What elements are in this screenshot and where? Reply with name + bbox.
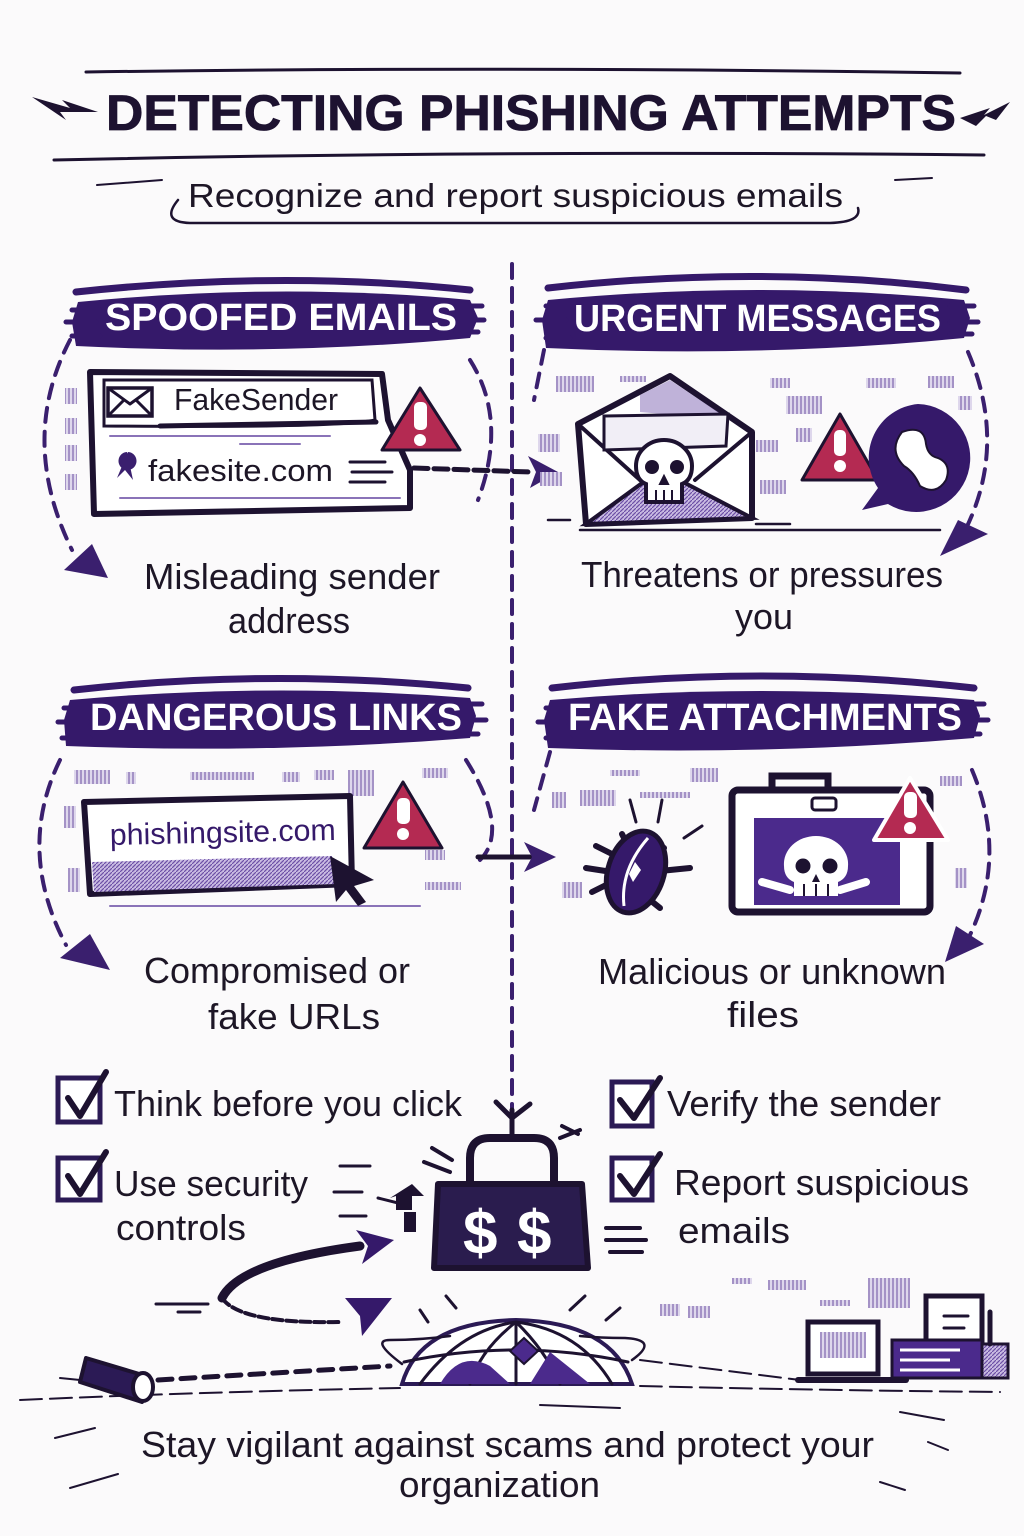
check: think before you click: Think before you click (114, 1083, 463, 1124)
subtitle: Recognize and report suspicious emails (188, 177, 843, 214)
check: report suspicious emails: Report suspicious (674, 1162, 969, 1203)
panel: dangerous links (39, 678, 556, 1037)
panel: spoofed emails: address (228, 600, 350, 641)
dashed arrow left (39, 760, 492, 970)
icon: envelope with skull (578, 376, 752, 524)
texture blocks (538, 376, 972, 494)
icon: padlock money bag: $ (517, 1199, 551, 1268)
panel: fake attachments: files (727, 994, 799, 1035)
curved arrows (156, 1230, 394, 1336)
footer text (141, 1424, 874, 1505)
icon: computers (798, 1296, 1008, 1380)
email card: fakesite.com (148, 453, 333, 488)
texture blocks (552, 768, 967, 898)
panel: fake attachments (534, 676, 989, 1035)
icon: speech bubble (862, 404, 970, 512)
panel: urgent messages: you (735, 596, 793, 637)
heading: fake attachments: FAKE ATTACHMENTS (568, 697, 962, 739)
check: use security controls: controls (116, 1207, 246, 1248)
dashed arrow right (534, 752, 989, 962)
texture blocks (65, 388, 77, 490)
center dashed divider (510, 264, 514, 1110)
icon: skull (636, 440, 692, 502)
heading: spoofed emails (66, 280, 484, 350)
icon: envelope (108, 388, 152, 416)
panel: urgent messages (534, 276, 988, 637)
title: DETECTING PHISHING ATTEMPTS (106, 85, 956, 141)
panel: spoofed emails (44, 280, 558, 641)
icon: skull (762, 836, 866, 896)
arrow to attachments (478, 842, 556, 872)
arrow to urgent panel (414, 456, 558, 488)
checklist left (58, 1072, 463, 1248)
icon: warning (802, 414, 878, 480)
ground sketch strokes (55, 1405, 948, 1490)
heading: fake attachments (538, 676, 988, 750)
browser address bar: phishingsite.com (109, 814, 336, 852)
icon: left lightning (32, 97, 98, 120)
check: report suspicious emails: emails (678, 1210, 790, 1251)
check: use security controls (58, 1152, 308, 1248)
heading: urgent messages (536, 276, 978, 351)
check: use security controls: Use security (114, 1163, 308, 1204)
heading: urgent messages: URGENT MESSAGES (574, 298, 941, 340)
texture blocks (64, 768, 461, 892)
icon: warning (874, 778, 948, 840)
caption: Threatens or pressures (581, 554, 943, 595)
heading: dangerous links (58, 678, 486, 749)
icon: bug (586, 800, 702, 921)
caption: Misleading sender (144, 556, 440, 597)
subtitle (97, 177, 932, 223)
caption: Compromised or (144, 950, 410, 991)
check: verify the sender: Verify the sender (667, 1083, 941, 1124)
icon: pin (117, 452, 136, 480)
footer text: Stay vigilant against scams and protect your (141, 1424, 874, 1465)
icon: warning (364, 782, 442, 848)
browser address bar (84, 796, 420, 906)
heading: dangerous links: DANGEROUS LINKS (90, 697, 462, 739)
panel: dangerous links: fake URLs (208, 996, 380, 1037)
check: think before you click (58, 1072, 463, 1124)
caption: Malicious or unknown (598, 951, 946, 992)
checklist right (612, 1078, 969, 1251)
email card: FakeSender (174, 382, 338, 417)
dashed arrow left (44, 340, 491, 578)
icon: warning (382, 388, 460, 450)
icon: data blocks (660, 1278, 910, 1318)
icon: globe (382, 1296, 644, 1384)
footer text: organization (399, 1464, 600, 1505)
network ground line (20, 1360, 1000, 1400)
icon: cursor (330, 856, 374, 906)
email card (90, 372, 410, 514)
icon: padlock money bag: $ (463, 1199, 497, 1268)
icon: usb cylinder (80, 1358, 390, 1402)
title (32, 69, 1010, 160)
icon: briefcase with skull (732, 776, 930, 912)
check: report suspicious emails (612, 1154, 969, 1251)
dashed arrow right (534, 350, 988, 556)
icon: padlock money bag (334, 1102, 646, 1268)
heading: spoofed emails: SPOOFED EMAILS (105, 297, 457, 339)
